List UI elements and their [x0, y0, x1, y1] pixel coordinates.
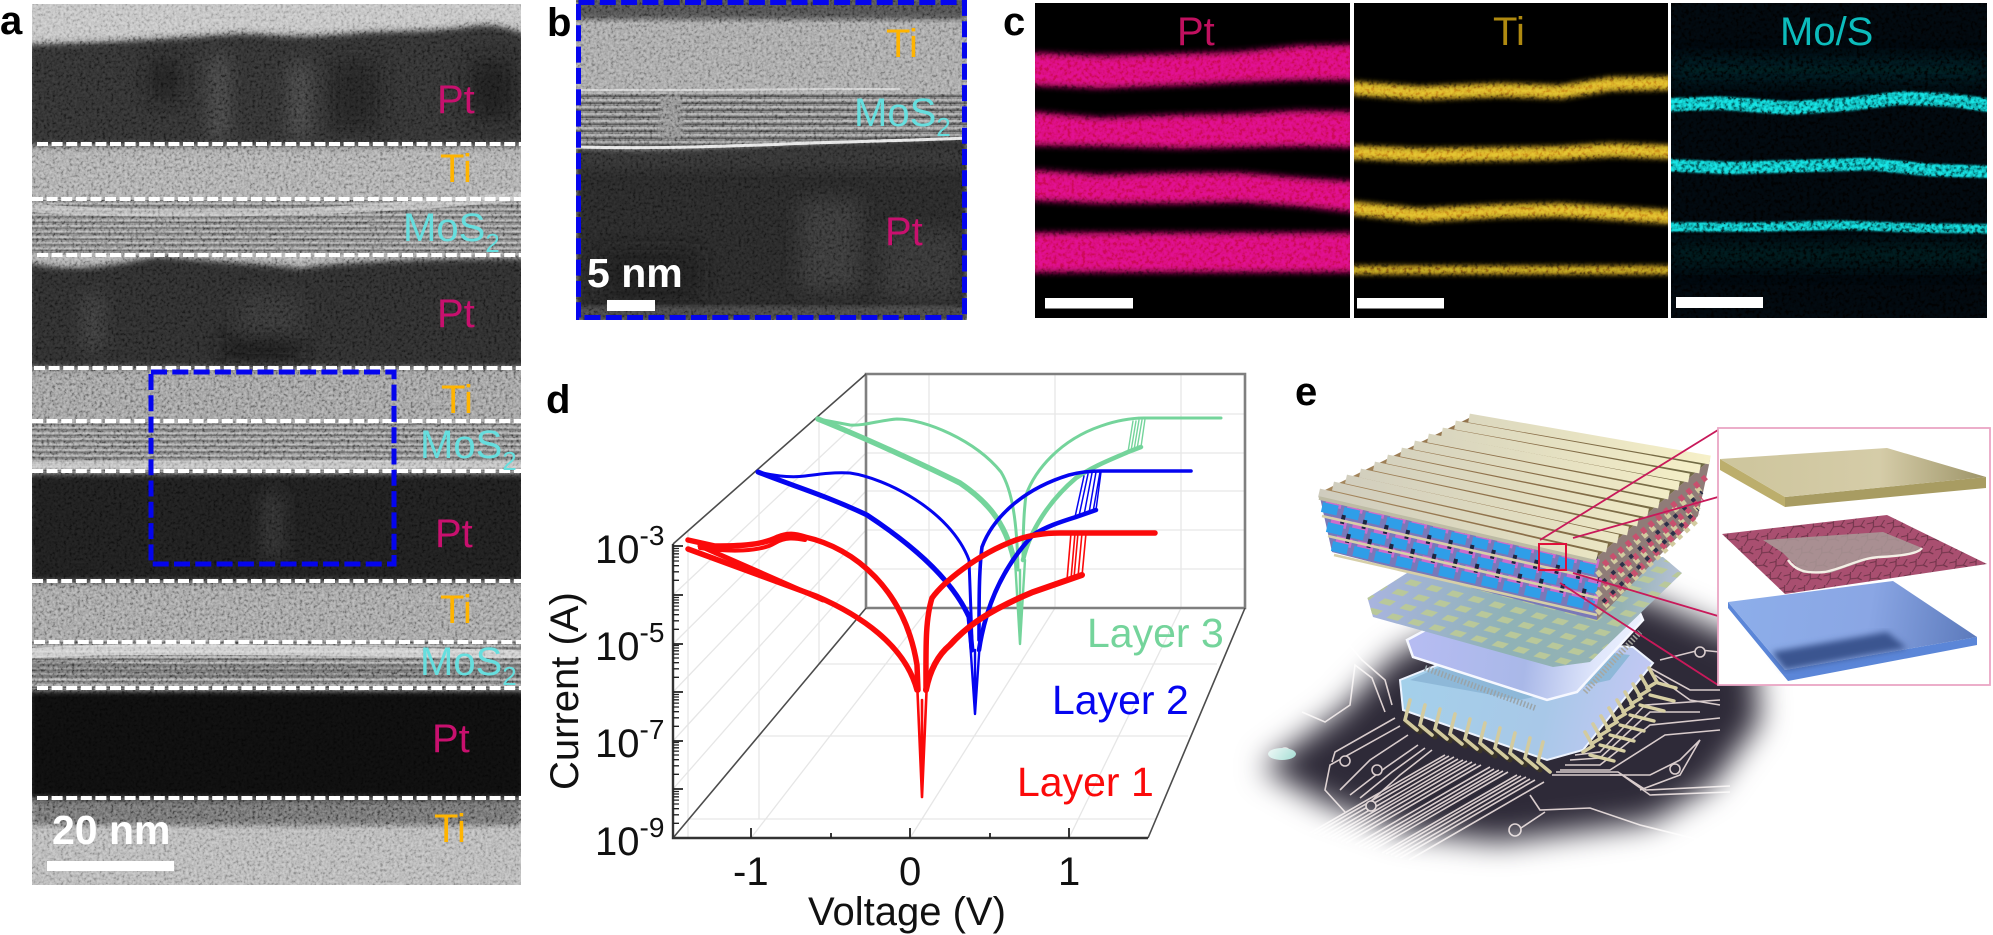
layer labels: MoS [420, 640, 502, 684]
label Pt: Pt [1177, 10, 1215, 54]
grid lines [673, 374, 1245, 838]
layer labels: Ti [440, 147, 472, 191]
pins [1405, 668, 1676, 772]
scale bar 5 nm: 5 nm [587, 250, 683, 296]
y tick labels: 10 [595, 722, 640, 766]
layer labels: Pt [437, 78, 475, 122]
labels b: 2 [936, 112, 951, 142]
layer labels: MoS [403, 206, 485, 250]
legend layer 1: Layer 1 [1017, 759, 1154, 805]
panel d: 3D I-V chart [543, 374, 1245, 934]
layer labels: Pt [437, 292, 475, 336]
map Ti [1350, 3, 1672, 318]
panel label b: b [547, 1, 571, 45]
dark Pt bands [28, 25, 526, 799]
x tick labels: -1 [733, 850, 769, 894]
scale bar [1045, 298, 1133, 308]
layer 1 curves [688, 533, 1155, 797]
TEM image layers [28, 4, 526, 885]
white dashed interface lines [32, 144, 521, 798]
x axis title: Voltage (V) [808, 890, 1006, 934]
zoom lines [1540, 430, 1718, 685]
label Mo/S: Mo/S [1780, 10, 1873, 54]
scale bar [1357, 298, 1444, 308]
y tick labels [595, 520, 664, 864]
label Ti: Ti [1493, 10, 1525, 54]
labels b [854, 22, 951, 254]
layer labels: Pt [435, 512, 473, 556]
y tick labels: 10 [595, 528, 640, 572]
layer labels: Pt [432, 717, 470, 761]
panel b: magnified TEM [576, 0, 967, 320]
side faces [1319, 493, 1597, 620]
inset box [1718, 428, 1990, 685]
y tick labels: -5 [640, 617, 664, 648]
labels b: Ti [886, 22, 918, 66]
y tick labels: -7 [640, 714, 664, 745]
scale bar 20 nm [47, 807, 174, 871]
bottom electrode plate [1728, 581, 1977, 681]
legend layer 2: Layer 2 [1052, 677, 1189, 723]
layer labels [403, 78, 517, 851]
layer labels: 2 [485, 228, 500, 258]
blotches in Pt [84, 56, 515, 558]
layer labels: MoS [420, 423, 502, 467]
y tick labels: -3 [640, 520, 664, 551]
y tick labels: 10 [595, 625, 640, 669]
layer labels: 2 [502, 661, 517, 691]
top electrode plate [1720, 448, 1986, 507]
scale bar 20 nm: 20 nm [52, 807, 170, 853]
x tick labels: 0 [899, 850, 921, 894]
device rows right [1597, 477, 1706, 613]
y axis title: Current (A) [543, 592, 587, 790]
layer labels: Ti [440, 588, 472, 632]
map Mo/S [1665, 3, 1993, 318]
device rows front [1322, 499, 1604, 615]
x tick labels: 1 [1058, 850, 1080, 894]
blue zoom box [151, 372, 394, 564]
panel c: EDS maps [1030, 3, 1993, 318]
map Pt [1030, 3, 1355, 318]
panel e: 3D integration schematic [1248, 414, 1991, 866]
legend layer 3: Layer 3 [1087, 610, 1224, 656]
pad plate [1368, 557, 1682, 667]
red selection square [1539, 544, 1566, 570]
lower chip [1400, 640, 1676, 772]
layer 3 curves [818, 418, 1221, 644]
x tick labels [733, 850, 1080, 894]
labels b: MoS [854, 91, 936, 135]
chart frame [673, 374, 1245, 838]
MoS2 switching layer [1722, 515, 1987, 594]
panel label c: c [1003, 0, 1025, 44]
layer labels: Ti [434, 807, 466, 851]
magnified TEM image [576, 0, 967, 320]
panel label d: d [546, 378, 570, 422]
labels b: Pt [885, 210, 923, 254]
layer labels: Ti [441, 378, 473, 422]
panel a: TEM cross-section [28, 4, 526, 885]
middle chip [1407, 590, 1643, 708]
scale bar [1676, 297, 1763, 308]
blue dashed frame [578, 2, 964, 318]
layer 2 curves [758, 471, 1191, 714]
panel label e: e [1295, 370, 1317, 414]
y tick labels: 10 [595, 820, 640, 864]
panel label a: a [0, 0, 23, 43]
circuit board [1248, 583, 1782, 866]
axis ticks [673, 546, 1069, 838]
layer labels: 2 [502, 446, 517, 476]
top bars [1319, 418, 1710, 557]
crossbar stack [1319, 418, 1710, 620]
y tick labels: -9 [640, 812, 664, 843]
